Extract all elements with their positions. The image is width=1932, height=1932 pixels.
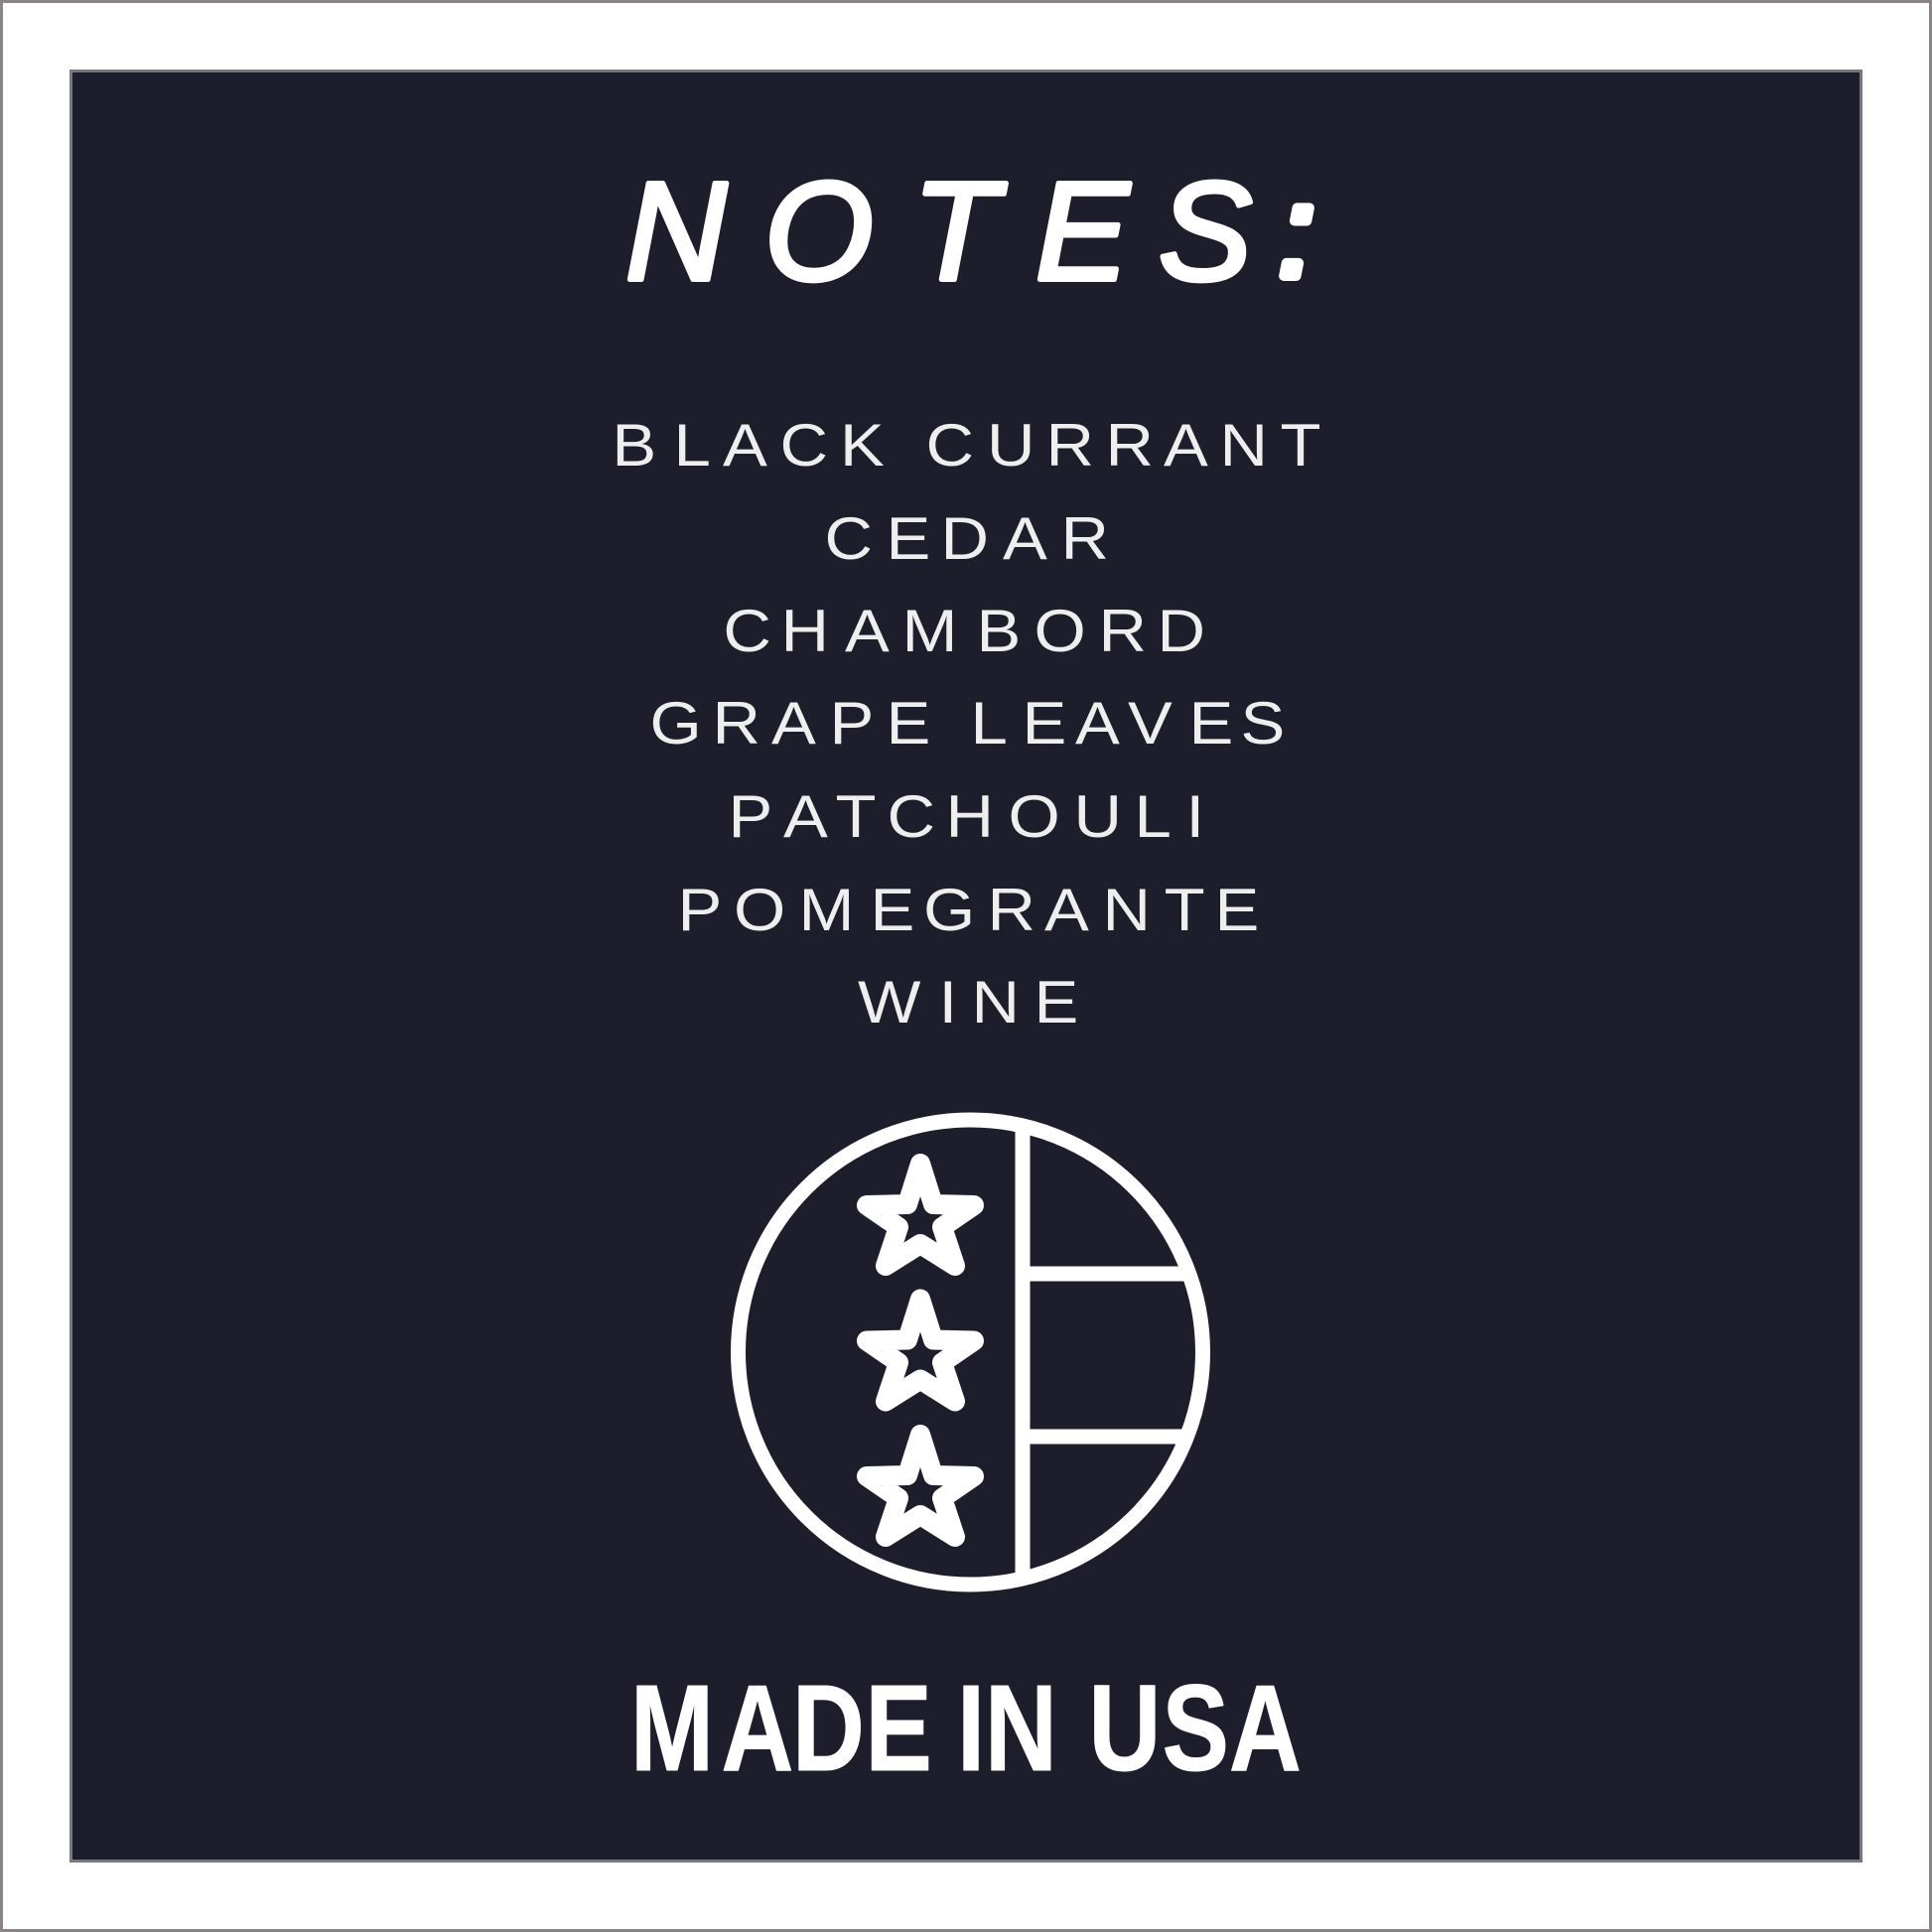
note: pomegrante: POMEGRANTE [678,877,1259,943]
note: grape leaves: GRAPE LEAVES [650,690,1285,757]
note: wine: WINE [858,969,1078,1035]
icon: circular USA flag [739,1120,1203,1585]
note: cedar: CEDAR [824,505,1109,572]
notes list [612,412,1320,1035]
title: NOTES [625,153,1252,310]
title: : [1279,159,1314,304]
note: black currant: BLACK CURRANT [612,412,1320,479]
note: patchouli: PATCHOULI [728,783,1204,850]
star middle [867,1299,974,1402]
note: chambord: CHAMBORD [723,598,1205,664]
star top [867,1164,974,1266]
flag circle [739,1120,1203,1585]
made in usa label: MADE IN USA [630,1659,1302,1796]
star bottom [867,1435,974,1537]
flag stripes [1023,1126,1189,1579]
